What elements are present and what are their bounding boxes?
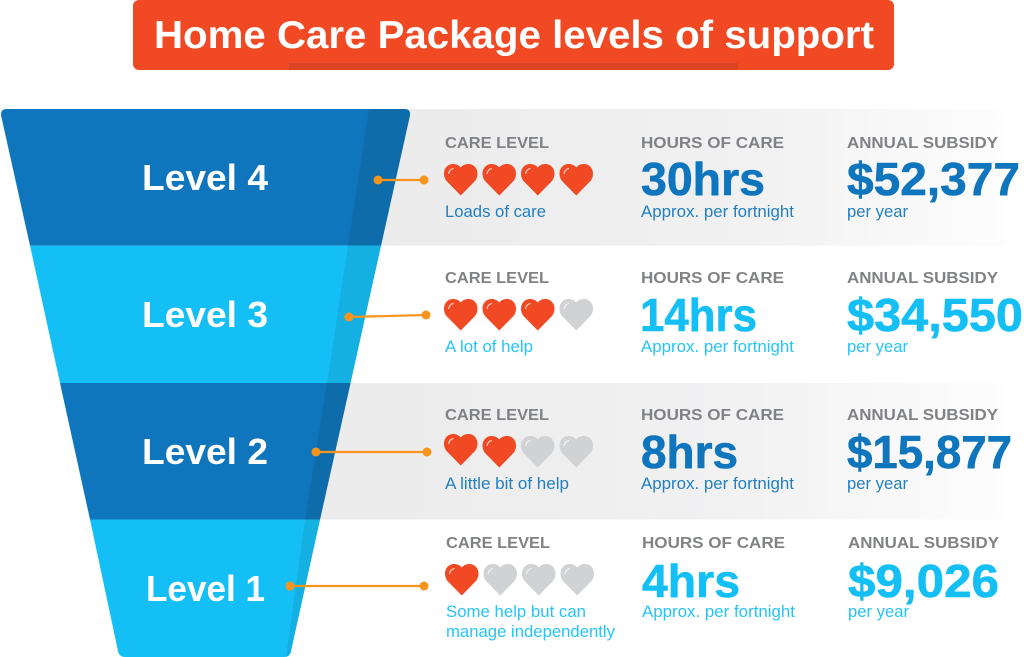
funnel segment: level 2 (60, 383, 350, 520)
label: level 4: Level 4 (142, 157, 268, 198)
hours note: Approx. per fortnight (641, 475, 794, 493)
panel: level 4 details (444, 135, 1020, 221)
panel: level 3 details (444, 270, 1023, 356)
value: hours: 30hrs (641, 153, 765, 205)
icon: hearts 2 of 4 (444, 434, 593, 468)
heading: care level: CARE LEVEL (445, 407, 549, 424)
subsidy note: per year (847, 203, 909, 221)
label: level 1: Level 1 (146, 568, 265, 609)
connector: level 3 (344, 310, 430, 322)
value: subsidy: $34,550 (847, 289, 1023, 341)
hours note: Approx. per fortnight (641, 338, 794, 356)
subsidy note: per year (847, 475, 909, 493)
funnel (1, 109, 410, 657)
heading: hours of care: HOURS OF CARE (641, 407, 784, 424)
value: subsidy: $9,026 (848, 555, 999, 607)
icon: hearts 3 of 4 (444, 299, 593, 330)
icon: hearts 1 of 4 (445, 564, 594, 596)
value: subsidy: $52,377 (847, 153, 1020, 205)
panel: level 2 details (444, 407, 1012, 493)
background band: level 4 (370, 109, 1004, 246)
title banner (133, 0, 894, 70)
connector: level 2 (312, 448, 432, 456)
value: hours: 4hrs (642, 555, 740, 607)
value: hours: 14hrs (640, 289, 757, 341)
icon: hearts 4 of 4 (444, 164, 593, 196)
connector: level 1 (286, 582, 428, 590)
value: hours: 8hrs (641, 426, 738, 478)
heading: hours of care: HOURS OF CARE (641, 135, 784, 152)
heading: hours of care: HOURS OF CARE (641, 270, 784, 287)
hours note: Approx. per fortnight (641, 203, 794, 221)
heading: annual subsidy: ANNUAL SUBSIDY (847, 407, 998, 424)
care description: manage independently (446, 623, 616, 641)
funnel segment: level 1 (90, 520, 320, 657)
heading: annual subsidy: ANNUAL SUBSIDY (847, 270, 998, 287)
panel: level 1 details (445, 535, 999, 641)
hours note: Approx. per fortnight (642, 603, 795, 621)
label: level 3: Level 3 (142, 294, 268, 335)
heading: care level: CARE LEVEL (446, 535, 550, 552)
value: subsidy: $15,877 (847, 426, 1012, 478)
funnel segment: level 3 (30, 246, 381, 383)
care description: A lot of help (445, 338, 533, 356)
care description: Some help but can (446, 603, 586, 621)
care description (446, 603, 616, 641)
subsidy note: per year (848, 603, 910, 621)
connector: level 4 (374, 176, 428, 184)
background band: level 2 (310, 383, 1004, 520)
care description: A little bit of help (445, 475, 569, 493)
care description: Loads of care (445, 203, 546, 221)
subsidy note: per year (847, 338, 909, 356)
heading: annual subsidy: ANNUAL SUBSIDY (847, 135, 998, 152)
funnel segment: level 4 (1, 109, 410, 246)
title: Home Care Package levels of support (154, 14, 874, 57)
heading: hours of care: HOURS OF CARE (642, 535, 785, 552)
heading: care level: CARE LEVEL (445, 270, 549, 287)
label: level 2: Level 2 (142, 431, 268, 472)
heading: care level: CARE LEVEL (445, 135, 549, 152)
heading: annual subsidy: ANNUAL SUBSIDY (848, 535, 999, 552)
